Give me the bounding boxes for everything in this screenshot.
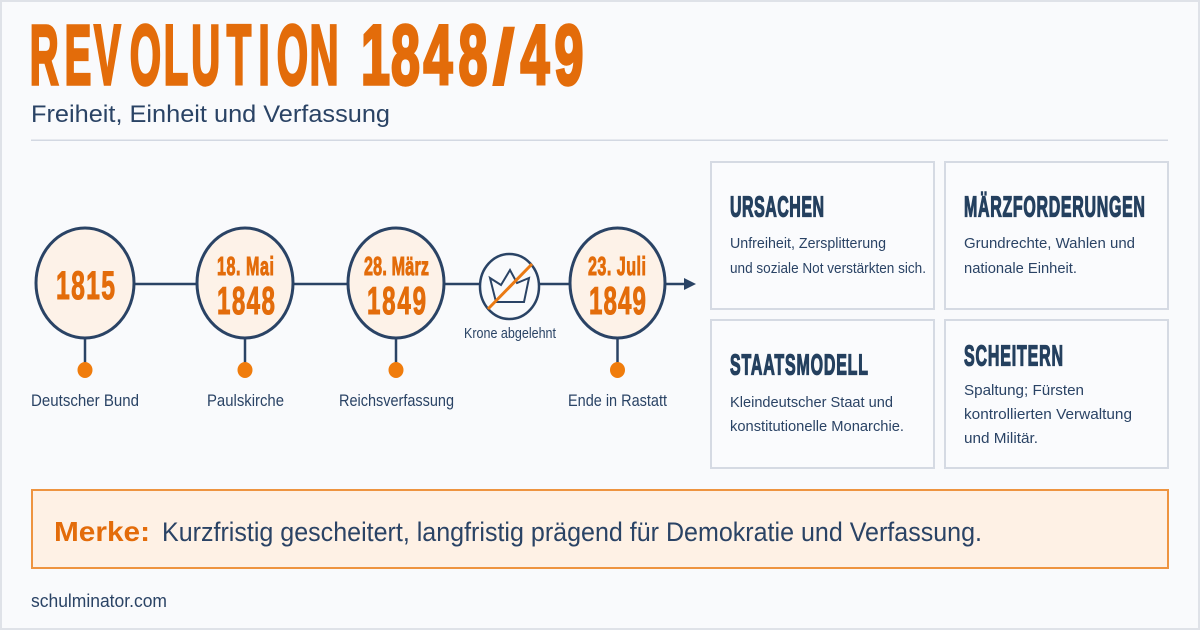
- footer source: schulminator.com: [31, 591, 167, 611]
- icon: rejected crown: [464, 254, 556, 342]
- milestone: 28. März 1849: Reichsverfassung: [339, 391, 454, 410]
- title: 49: [520, 8, 583, 102]
- panel: Ursachen: [711, 162, 934, 309]
- icon: rejected crown: Krone abgelehnt: [464, 326, 556, 342]
- panel: Märzforderungen: Grundrechte, Wahlen und: [964, 235, 1135, 252]
- panel: Ursachen: URSACHEN: [730, 190, 824, 223]
- panel: Märzforderungen: [945, 162, 1168, 309]
- callout: Merke: Merke:: [54, 516, 150, 547]
- milestone: 1815: Deutscher Bund: [31, 391, 139, 410]
- panel: Ursachen: und soziale Not verstärkten sich.: [730, 260, 926, 277]
- panel: Scheitern: [945, 320, 1168, 468]
- panel: Staatsmodell: STAATSMODELL: [730, 348, 868, 381]
- milestone: 28. März 1849: 1849: [367, 279, 426, 322]
- panel: Scheitern: SCHEITERN: [964, 339, 1063, 372]
- panel: Märzforderungen: MÄRZFORDERUNGEN: [964, 190, 1145, 223]
- milestone: 18. Mai 1848: 1848: [217, 279, 275, 322]
- panel: Staatsmodell: Kleindeutscher Staat und: [730, 394, 893, 411]
- callout: Merke: [32, 490, 1168, 568]
- timeline: [31, 228, 696, 410]
- milestone: 28. März 1849: [339, 228, 454, 410]
- milestone: 23. Juli 1849: 23. Juli: [588, 251, 646, 281]
- panel: Ursachen: Unfreiheit, Zersplitterung: [730, 235, 886, 252]
- timeline axis arrow: [134, 278, 696, 290]
- panel: Scheitern: kontrollierten Verwaltung: [964, 406, 1132, 423]
- title: /: [493, 15, 514, 100]
- panel: Staatsmodell: [711, 320, 934, 468]
- title: [30, 7, 583, 102]
- milestone: 1815: [31, 228, 139, 410]
- title: REVOLUTION: [30, 7, 339, 102]
- milestone: 18. Mai 1848: Paulskirche: [207, 391, 284, 410]
- milestone: 23. Juli 1849: Ende in Rastatt: [568, 391, 667, 410]
- panel: Scheitern: Spaltung; Fürsten: [964, 382, 1084, 399]
- subtitle: Freiheit, Einheit und Verfassung: [31, 101, 390, 128]
- milestone: 28. März 1849: 28. März: [364, 251, 429, 281]
- milestone: 18. Mai 1848: 18. Mai: [217, 251, 274, 281]
- milestone: 23. Juli 1849: [568, 228, 667, 410]
- milestone: 1815: 1815: [56, 264, 115, 309]
- callout: Merke: Kurzfristig gescheitert, langfristig prägend für Demokratie und Verfassung.: [162, 517, 982, 547]
- milestone: 23. Juli 1849: 1849: [589, 279, 646, 322]
- panel: Scheitern: und Militär.: [964, 430, 1038, 447]
- title: 1848: [361, 8, 487, 102]
- panel: Staatsmodell: konstitutionelle Monarchie.: [730, 418, 904, 435]
- milestone: 18. Mai 1848: [197, 228, 293, 410]
- panel: Märzforderungen: nationale Einheit.: [964, 260, 1077, 277]
